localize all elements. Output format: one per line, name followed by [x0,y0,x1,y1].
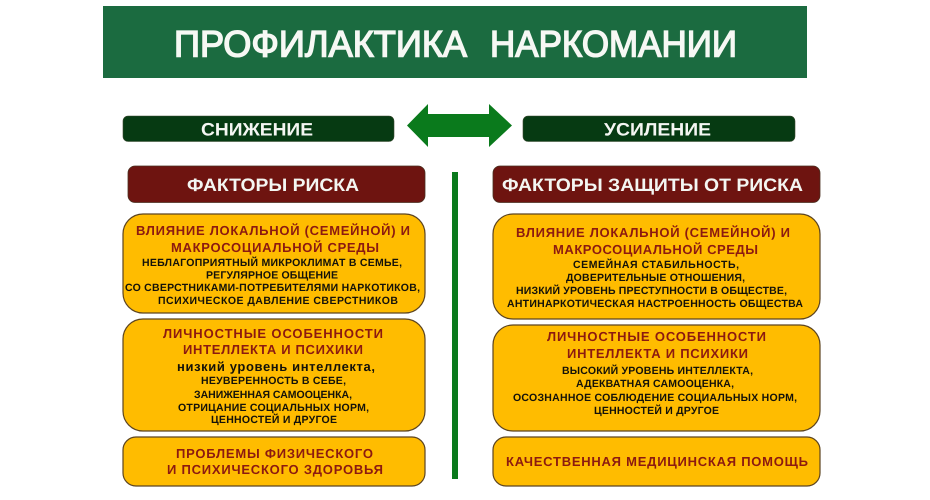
panel: risk, health [123,437,425,486]
panel: protection, health [493,437,820,486]
panel text [125,256,420,307]
panel heading [516,225,790,257]
bar: decrease: СНИЖЕНИЕ [201,120,313,140]
panel text: ВЫСОКИЙ УРОВЕНЬ ИНТЕЛЛЕКТА, [562,364,753,377]
panel heading [136,223,410,255]
heading: risk factors: ФАКТОРЫ РИСКА [187,175,359,195]
title banner [103,6,807,78]
panel text [177,359,375,426]
panel text: РЕГУЛЯРНОЕ ОБЩЕНИЕ [206,270,338,282]
bar: increase [523,116,795,142]
panel text: АДЕКВАТНАЯ САМООЦЕНКА, [576,378,734,390]
panel text: низкий уровень интеллекта, [177,359,375,374]
panel heading: МАКРОСОЦИАЛЬНОЙ СРЕДЫ [553,242,758,257]
panel heading: ИНТЕЛЛЕКТА И ПСИХИКИ [183,342,363,357]
title banner: НАРКОМАНИИ [490,24,737,64]
panel: protection, social environment [493,214,820,319]
panel heading [167,446,383,477]
panel text [513,364,797,417]
panel text: ОТРИЦАНИЕ СОЦИАЛЬНЫХ НОРМ, [178,402,369,414]
panel heading [547,329,766,361]
panel text: НИЗКИЙ УРОВЕНЬ ПРЕСТУПНОСТИ В ОБЩЕСТВЕ, [516,284,787,297]
panel: protection, personality [493,325,820,431]
panel heading: ЛИЧНОСТНЫЕ ОСОБЕННОСТИ [547,329,766,344]
heading: risk factors [128,166,425,202]
panel heading: ВЛИЯНИЕ ЛОКАЛЬНОЙ (СЕМЕЙНОЙ) И [516,225,790,240]
panel text: ЗАНИЖЕННАЯ САМООЦЕНКА, [194,389,352,401]
bar: decrease [123,116,394,142]
panel text: ЦЕННОСТЕЙ И ДРУГОЕ [594,404,719,417]
panel text: АНТИНАРКОТИЧЕСКАЯ НАСТРОЕННОСТЬ ОБЩЕСТВА [507,298,803,310]
panel text: НЕБЛАГОПРИЯТНЫЙ МИКРОКЛИМАТ В СЕМЬЕ, [142,256,402,269]
panel heading: ПРОБЛЕМЫ ФИЗИЧЕСКОГО [176,446,373,461]
panel text: СО СВЕРСТНИКАМИ-ПОТРЕБИТЕЛЯМИ НАРКОТИКОВ, [125,282,420,294]
panel heading: И ПСИХИЧЕСКОГО ЗДОРОВЬЯ [167,462,383,477]
panel: risk, social environment [123,214,425,313]
title banner: ПРОФИЛАКТИКА [174,24,467,64]
panel text: НЕУВЕРЕННОСТЬ В СЕБЕ, [201,375,346,387]
panel text [507,258,803,310]
panel heading: ЛИЧНОСТНЫЕ ОСОБЕННОСТИ [163,326,383,341]
heading: protection factors [493,166,820,202]
panel text: ЦЕННОСТЕЙ И ДРУГОЕ [211,413,337,426]
panel text: ДОВЕРИТЕЛЬНЫЕ ОТНОШЕНИЯ, [566,272,745,284]
panel heading: КАЧЕСТВЕННАЯ МЕДИЦИНСКАЯ ПОМОЩЬ [506,454,808,469]
panel heading: ИНТЕЛЛЕКТА И ПСИХИКИ [567,346,748,361]
panel: risk, personality [123,319,425,431]
panel heading: МАКРОСОЦИАЛЬНОЙ СРЕДЫ [171,240,379,255]
panel text: ПСИХИЧЕСКОЕ ДАВЛЕНИЕ СВЕРСТНИКОВ [158,295,398,307]
bar: increase: УСИЛЕНИЕ [604,120,711,140]
heading: protection factors: ФАКТОРЫ ЗАЩИТЫ ОТ РИСКА [502,175,803,195]
divider line [452,172,458,479]
panel heading: ВЛИЯНИЕ ЛОКАЛЬНОЙ (СЕМЕЙНОЙ) И [136,223,410,238]
icon: double-headed arrow [407,104,512,147]
panel text: ОСОЗНАННОЕ СОБЛЮДЕНИЕ СОЦИАЛЬНЫХ НОРМ, [513,392,797,404]
panel text: СЕМЕЙНАЯ СТАБИЛЬНОСТЬ, [573,258,739,271]
panel heading [163,326,383,357]
